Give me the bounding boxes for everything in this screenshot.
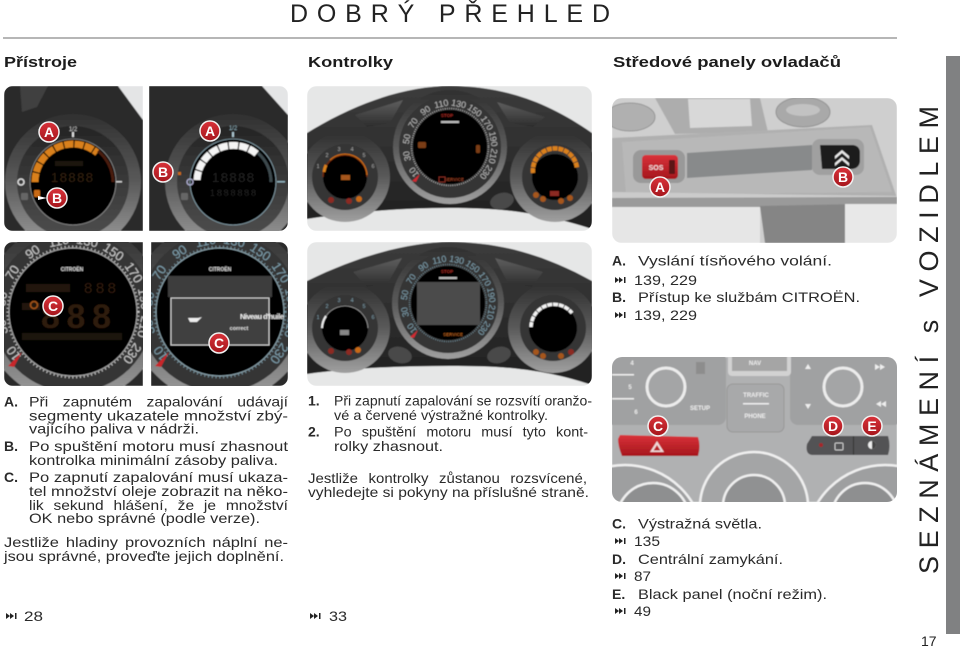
badge A white gauge (200, 121, 220, 141)
panel: lower centre console: NAV (749, 361, 761, 367)
text block: lower console legend: 49 (634, 603, 651, 619)
panel: dashboard warning lamps with display: 3 (337, 298, 341, 304)
panel: speedometer orange display: 150 (100, 240, 127, 264)
panel: dashboard warning lamps with display: 5 (362, 304, 366, 310)
panel: dashboard warning lamps with display: 190 (485, 287, 498, 303)
badges: upper console (650, 167, 853, 197)
panel: dashboard warning lamps lit: SERVICE (444, 177, 464, 182)
panel: upper centre console (605, 97, 897, 243)
panel: dashboard warning lamps lit: 1 (316, 164, 320, 170)
text block: instruments: OK nebo správné (podle verze). (29, 510, 260, 526)
panel: dashboard warning lamps lit: 210 (487, 148, 499, 165)
panel: speedometer oil level message: 110 (194, 232, 217, 250)
text block: instruments: C. (4, 469, 18, 485)
vertical section title: SEZNÁMENÍ s VOZIDLEM (914, 106, 944, 574)
panel: speedometer orange display: 110 (47, 232, 70, 250)
panel: dashboard warning lamps with display: 2 (325, 304, 329, 310)
badge B orange gauge: B (52, 190, 62, 206)
heading: Kontrolky: Kontrolky (308, 54, 394, 71)
text block: warning lamps: 1. (308, 392, 320, 408)
text block: lower console legend: Centrální zamykání. (638, 551, 783, 567)
panel: dashboard warning lamps with display: 10 (405, 321, 419, 335)
panel: speedometer orange display: 170 (122, 259, 146, 286)
badge C oil message: C (214, 335, 224, 351)
page reference 33: 33 (329, 608, 347, 624)
panel: dashboard warning lamps with display: 110 (431, 254, 447, 266)
badge D lock (823, 416, 843, 436)
text block: upper console legend: Vyslání tísňového volání. (638, 252, 832, 268)
page reference 28 (6, 608, 43, 624)
panel: speedometer oil level message: 10 (150, 343, 171, 364)
panel: fuel gauge orange: 1/2 (69, 127, 78, 133)
panel: speedometer oil level message: 30 (140, 318, 158, 336)
panel: dashboard warning lamps lit: 10 (407, 165, 421, 179)
panel: dashboard warning lamps lit: 150 (466, 102, 484, 119)
text block: lower console legend: D. (612, 551, 626, 567)
badge B services: B (838, 169, 848, 185)
panel: speedometer orange display: 90 (22, 242, 43, 262)
text block: instruments: kontrolka minimální zásoby paliva. (29, 452, 278, 468)
text block: instruments: B. (4, 438, 18, 454)
panel: dashboard warning lamps lit: 50 (401, 133, 413, 145)
panel: dashboard warning lamps with display: 1 (316, 315, 320, 321)
text block: warning lamps: vé a červené výstražné kontrolky. (334, 407, 548, 423)
panel: dashboard warning lamps with display (300, 242, 598, 386)
panel: dashboard warning lamps with display: 210 (485, 304, 497, 321)
text block: lower console legend (612, 516, 827, 619)
page reference 28: 28 (24, 608, 43, 624)
text block: upper console legend: 139, 229 (634, 307, 697, 323)
panel: dashboard warning lamps lit: STOP (441, 113, 453, 118)
panel: speedometer oil level message: 230 (267, 340, 292, 367)
panel: speedometer oil level message: 130 (222, 231, 246, 250)
badge B orange gauge (38, 188, 67, 208)
panel: speedometer orange display (4, 242, 143, 386)
text block: warning lamps (308, 392, 592, 500)
text block: lower console legend: Výstražná světla. (638, 516, 762, 532)
heading: Středové panely ovladačů: Středové panely ovladačů (613, 54, 841, 71)
panel: fuel gauge orange (4, 86, 143, 231)
panel: fuel gauge orange: 18888 (51, 170, 93, 185)
badge A orange gauge (39, 122, 59, 142)
badge C oil message (209, 333, 229, 353)
text block: lower console legend: E. (612, 586, 625, 602)
text block: instruments: lik sekund hlášení, že je množství (29, 497, 288, 513)
panel: dashboard warning lamps lit: 110 (433, 98, 449, 110)
panel: fuel gauge white: 1888888 (210, 188, 256, 198)
text block: instruments: Po zapnutí zapalování musí ukaza- (29, 469, 288, 485)
title rule (3, 37, 897, 39)
panel: dashboard warning lamps lit: 90 (418, 104, 432, 117)
badges: instrument panels (38, 121, 229, 353)
text block: upper console legend (612, 252, 860, 323)
badge B white gauge: B (158, 164, 168, 180)
panel: speedometer orange display: 210 (134, 315, 154, 339)
badge B services (833, 167, 853, 187)
text block: warning lamps: vyhledejte si pokyny na příslušné straně. (308, 484, 589, 500)
panel: speedometer orange display: 190 (135, 287, 154, 311)
panel: dashboard warning lamps with display: 6 (371, 315, 375, 321)
text block: upper console legend: B. (612, 289, 626, 305)
panel: speedometer oil level message: 170 (269, 259, 293, 286)
badge A white gauge: A (205, 123, 215, 139)
panel: lower centre console: SETUP (690, 406, 710, 412)
panel: dashboard warning lamps lit: 130 (450, 97, 467, 110)
panel: dashboard warning lamps lit: 230 (478, 163, 494, 181)
text block: warning lamps: Při zapnutí zapalování se rozsvítí oranžo- (334, 392, 592, 408)
badge C hazard (648, 416, 668, 436)
panel: dashboard warning lamps lit: 5 (362, 153, 366, 159)
text block: instruments: Při zapnutém zapalování udávají (29, 394, 288, 410)
panel: dashboard warning lamps lit: 3 (337, 147, 341, 153)
panel: dashboard warning lamps lit: 30 (401, 150, 413, 162)
panel: speedometer oil level message: correct (230, 326, 248, 332)
panel: lower centre console: 6 (634, 410, 638, 416)
panel: dashboard warning lamps with display: SERVICE (443, 332, 463, 337)
badge B white gauge (153, 162, 173, 182)
side tab (946, 56, 960, 634)
panel: fuel gauge white (149, 86, 288, 231)
text block: lower console legend: 135 (634, 533, 660, 549)
text block: instruments: Jestliže hladiny provozních náplní ne- (4, 534, 288, 550)
text block: instruments: vajícího paliva v nádrži. (29, 420, 199, 436)
panel: speedometer oil level message: 50 (140, 290, 157, 307)
panel: dashboard warning lamps lit: 170 (479, 114, 495, 132)
panel: lower centre console: 5 (628, 385, 632, 391)
panel: dashboard warning lamps lit: 6 (371, 164, 375, 170)
text block: warning lamps: Jestliže kontrolky zůstanou rozsvícené, (308, 470, 587, 486)
title: DOBRÝ PŘEHLED (290, 0, 610, 28)
panel: fuel gauge white: 1/2 (229, 126, 238, 132)
heading: Přístroje: Přístroje (4, 54, 77, 71)
panel: dashboard warning lamps with display: STOP (441, 269, 453, 274)
panel: dashboard warning lamps with display: 4 (350, 298, 354, 304)
panel: dashboard warning lamps lit: 4 (350, 147, 354, 153)
text block: warning lamps: rolky zhasnout. (334, 438, 443, 454)
text block: warning lamps: Po spuštění motoru musí tyto kont- (334, 424, 588, 440)
panel: speedometer oil level message: 70 (149, 262, 169, 283)
panel: dashboard warning lamps lit: 70 (406, 116, 420, 130)
panel: speedometer oil level message: CITROËN (209, 266, 232, 273)
panel: dashboard warning lamps with display: 230 (476, 319, 492, 337)
text block: lower console legend: C. (612, 516, 626, 532)
panel: dashboard warning lamps with display: 90 (416, 260, 430, 273)
panel: fuel gauge white: 18888 (212, 170, 254, 185)
badge D lock: D (828, 418, 838, 434)
panel: dashboard warning lamps with display: 170 (477, 270, 493, 288)
text block: instruments: Po spuštění motoru musí zhasnout (29, 438, 288, 454)
panel: speedometer oil level message: 190 (282, 287, 301, 311)
panel: speedometer oil level message (151, 242, 288, 386)
panel: speedometer orange display: 70 (2, 262, 22, 283)
badge A orange gauge: A (44, 124, 54, 140)
badge C hazard: C (653, 418, 663, 434)
text block: upper console legend: 139, 229 (634, 272, 697, 288)
text block: instruments (3, 394, 288, 564)
badge E black panel: E (867, 418, 877, 434)
panel: dashboard warning lamps with display: 50 (399, 289, 411, 301)
text block: instruments: tel množství oleje zobrazit na něko- (29, 483, 288, 499)
page reference 33 (310, 608, 347, 624)
panel: speedometer oil level message: 90 (169, 242, 190, 262)
panel: dashboard warning lamps lit: 190 (487, 131, 500, 147)
panel: upper centre console: SOS (649, 165, 664, 172)
panel: dashboard warning lamps lit (300, 86, 600, 231)
text block: lower console legend: Black panel (noční režim). (638, 586, 827, 602)
badge E black panel (862, 416, 882, 436)
panel: speedometer oil level message: 210 (281, 315, 301, 339)
panel: dashboard warning lamps with display: 150 (464, 258, 482, 275)
panel: lower centre console: TRAFFIC (743, 393, 769, 399)
text block: lower console legend: 87 (634, 568, 651, 584)
panel: lower centre console: 4 (630, 361, 634, 367)
badges: lower console (648, 416, 882, 436)
text block: warning lamps: 2. (308, 424, 320, 440)
panel: speedometer oil level message: 150 (247, 240, 274, 264)
panel: dashboard warning lamps with display: 70 (404, 272, 418, 286)
panel: speedometer orange display: CITROËN (61, 266, 84, 273)
text block: instruments: jsou správné, proveďte jejich doplnění. (3, 548, 284, 564)
badge C speedometer (43, 296, 63, 316)
panel: dashboard warning lamps with display: 130 (448, 253, 465, 266)
panel: dashboard warning lamps with display: 30 (399, 306, 411, 318)
text block: upper console legend: A. (612, 252, 626, 268)
panel: lower centre console (612, 357, 897, 502)
panel: lower centre console: PHONE (744, 414, 766, 420)
panel: speedometer orange display: 230 (120, 340, 145, 367)
text block: instruments: segmenty ukazatele množství zbý- (29, 408, 288, 424)
panel: dashboard warning lamps lit: 2 (325, 153, 329, 159)
badge A SOS (650, 177, 670, 197)
badge C speedometer: C (48, 298, 58, 314)
text block: instruments: A. (4, 394, 18, 410)
badge A SOS: A (655, 179, 665, 195)
panel: speedometer orange display: 130 (75, 231, 99, 250)
panel: speedometer orange display: 10 (3, 343, 24, 364)
panel: speedometer orange display: 888 (41, 298, 111, 336)
text block: upper console legend: Přístup ke službám CITROËN. (638, 289, 860, 305)
panel: speedometer oil level message: Niveau d'huile (240, 312, 284, 321)
panel: speedometer orange display: 888 (84, 280, 116, 297)
